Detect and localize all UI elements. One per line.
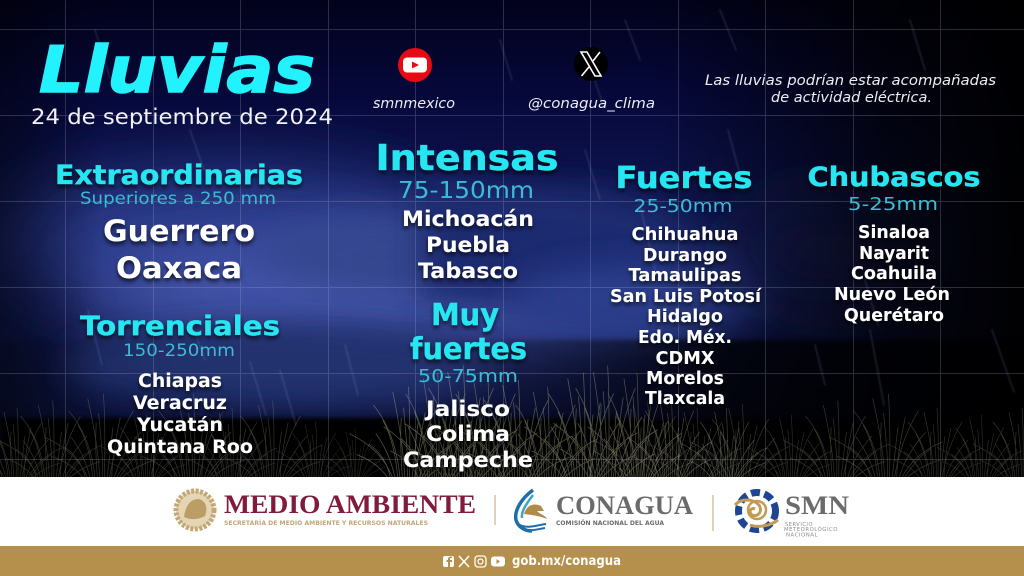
panel: fuertes: Tamaulipas <box>628 266 742 286</box>
logo: smn <box>735 490 849 538</box>
icon: national seal <box>176 491 214 529</box>
panel: extraordinarias: Guerrero <box>103 214 255 248</box>
panel: chubascos: Sinaloa <box>858 223 930 243</box>
title: Lluvias <box>39 34 315 108</box>
panel: muy fuertes: 50-75mm <box>418 367 518 387</box>
logo: conagua <box>516 490 693 531</box>
panel: fuertes: Fuertes <box>616 161 752 196</box>
panel: muy fuertes: Colima <box>426 422 510 446</box>
icon: youtube <box>398 48 432 82</box>
note: electrical activity: de actividad eléctrica. <box>771 90 932 106</box>
panel: torrenciales: 150-250mm <box>123 341 235 361</box>
icon: X <box>574 47 608 81</box>
panel: fuertes: Tlaxcala <box>645 389 725 409</box>
panel: intensas: Puebla <box>426 233 510 257</box>
panel: chubascos <box>808 162 980 326</box>
panel: fuertes: Edo. Méx. <box>638 328 732 348</box>
panel: torrenciales: Veracruz <box>133 393 227 414</box>
logo: medio ambiente: SECRETARÍA DE MEDIO AMBIENTE Y RECURSOS NATURALES <box>224 519 428 527</box>
footer gold band <box>0 546 1024 576</box>
logo: conagua: CONAGUA <box>556 490 693 520</box>
footer url: gob.mx/conagua <box>512 553 621 569</box>
footer white band <box>0 477 1024 546</box>
panel: extraordinarias: Superiores a 250 mm <box>80 189 276 208</box>
panel: torrenciales: Torrenciales <box>80 311 280 342</box>
note: electrical activity <box>705 73 996 106</box>
panel: chubascos: Nayarit <box>859 244 929 264</box>
panel: intensas: 75-150mm <box>398 178 534 204</box>
panel: fuertes <box>610 161 762 409</box>
grass <box>0 366 1024 478</box>
panel: extraordinarias <box>55 160 303 285</box>
panel: fuertes: CDMX <box>656 349 715 369</box>
date: 24 de septiembre de 2024 <box>31 105 333 130</box>
divider <box>712 495 714 531</box>
panel: chubascos: Querétaro <box>844 306 944 326</box>
panel: intensas: Michoacán <box>402 207 534 231</box>
panel: torrenciales: Quintana Roo <box>107 437 253 458</box>
icon: smn gear and spiral <box>735 492 778 530</box>
panel: fuertes: 25-50mm <box>634 196 732 217</box>
panel: intensas: Tabasco <box>418 259 518 283</box>
panel: extraordinarias: Extraordinarias <box>55 160 303 191</box>
X handle: @conagua_clima <box>528 96 655 112</box>
panel: chubascos: Chubascos <box>808 162 980 193</box>
panel: extraordinarias: Oaxaca <box>116 251 242 285</box>
panel: intensas: Intensas <box>376 138 558 179</box>
panel: intensas <box>376 138 558 283</box>
divider <box>494 495 496 525</box>
panel: torrenciales: Chiapas <box>138 371 222 392</box>
logo: medio ambiente <box>176 489 476 529</box>
panel: muy fuertes: Campeche <box>403 448 533 472</box>
panel: muy fuertes: Muy <box>431 298 499 333</box>
note: electrical activity: Las lluvias podrían estar acompañadas <box>705 73 996 89</box>
panel: torrenciales <box>80 311 280 458</box>
logo: smn: METEOROLÓGICO <box>784 526 838 533</box>
logo: smn: NACIONAL <box>786 532 818 538</box>
panel: chubascos: 5-25mm <box>848 194 938 215</box>
logo: smn: SERVICIO <box>785 522 813 528</box>
panel: fuertes: Chihuahua <box>632 225 738 245</box>
panel: muy fuertes <box>403 298 533 472</box>
youtube handle: smnmexico <box>373 96 455 112</box>
logo: smn: SMN <box>785 490 849 520</box>
panel: chubascos: Coahuila <box>851 264 937 284</box>
rain streaks <box>88 10 1014 425</box>
panel: muy fuertes: fuertes <box>410 332 527 367</box>
panel: chubascos: Nuevo León <box>834 285 950 305</box>
panel: muy fuertes: Jalisco <box>424 397 510 421</box>
panel: fuertes: Durango <box>643 246 727 266</box>
panel: fuertes: San Luis Potosí <box>610 287 762 307</box>
icon: conagua <box>516 490 547 531</box>
panel: fuertes: Morelos <box>646 369 724 389</box>
logo: conagua: COMISIÓN NACIONAL DEL AGUA <box>556 520 664 527</box>
social icons row <box>443 556 505 567</box>
panel: torrenciales: Yucatán <box>136 415 223 436</box>
logo: medio ambiente: MEDIO AMBIENTE <box>224 489 476 519</box>
panel: fuertes: Hidalgo <box>647 307 723 327</box>
